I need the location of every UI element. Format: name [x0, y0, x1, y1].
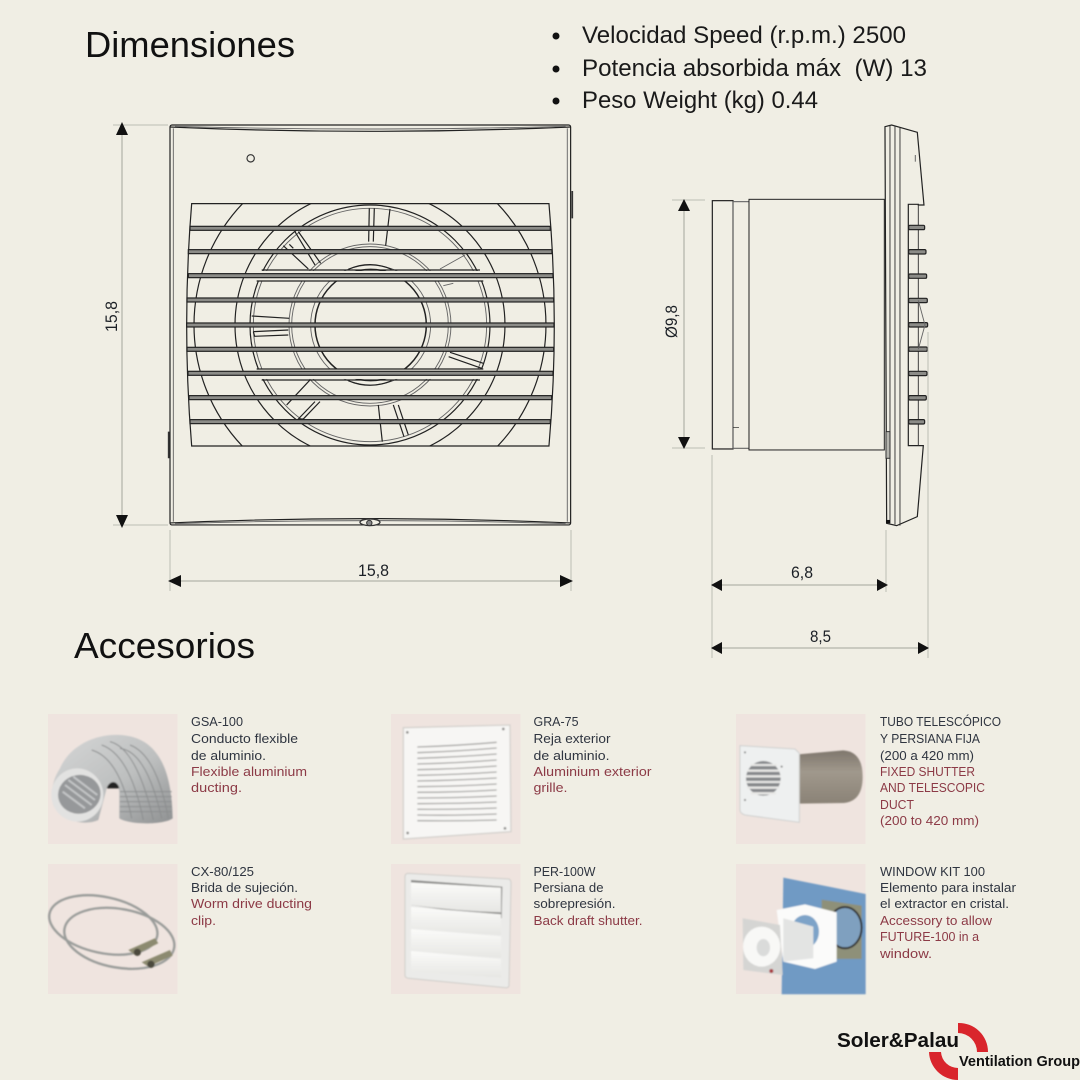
accessory: CX-80/125 — [44, 864, 312, 994]
image: back draft shutter — [405, 873, 511, 988]
text: GRA-75: GRA-75 — [534, 714, 578, 729]
accessory: window kit — [736, 864, 1017, 994]
text: CX-80/125: Brida de sujeción. — [191, 880, 298, 895]
text: window kit: WINDOW KIT 100 — [880, 864, 985, 879]
title: Dimensiones: Dimensiones — [85, 24, 295, 65]
text: CX-80/125: clip. — [191, 913, 216, 928]
text: window kit: Accessory to allow — [880, 913, 993, 928]
text: window kit — [879, 864, 1017, 961]
text: GSA-100: Conducto flexible — [191, 731, 298, 746]
text: GRA-75: grille. — [534, 780, 568, 795]
text: window kit: FUTURE-100 in a — [880, 929, 980, 944]
depth dimension label 68: 6,8 — [791, 563, 813, 582]
text: GSA-100: GSA-100 — [191, 714, 243, 729]
image: flexible duct — [47, 735, 173, 826]
text: GRA-75 — [534, 714, 652, 795]
diameter dimension label: Ø9,8 — [662, 305, 681, 338]
logo: Soler&Palau Ventilation Group — [837, 1023, 1080, 1080]
height dimension label: 15,8 — [102, 301, 121, 332]
specifications list — [552, 22, 927, 114]
text: GSA-100: ducting. — [191, 780, 242, 795]
text: telescopic tube: DUCT — [880, 797, 914, 812]
text: telescopic tube — [880, 714, 1001, 828]
accessory: PER-100W — [391, 864, 642, 994]
text: GSA-100: de aluminio. — [191, 748, 266, 763]
text: GSA-100 — [191, 714, 307, 795]
accessory: GRA-75 — [391, 714, 652, 844]
specifications list: Peso Weight (kg) 0.44 — [582, 87, 818, 114]
image: telescopic duct with shutter — [740, 746, 863, 822]
side view dimension lines — [662, 199, 929, 658]
text: telescopic tube: (200 a 420 mm) — [880, 748, 974, 763]
text: telescopic tube: (200 to 420 mm) — [880, 813, 979, 828]
text: window kit: window. — [879, 946, 932, 961]
image: exterior grille — [403, 725, 511, 839]
text: PER-100W: PER-100W — [534, 864, 596, 879]
specifications list: Velocidad Speed (r.p.m.) 2500 — [582, 22, 906, 49]
text: window kit: Elemento para instalar — [880, 880, 1017, 895]
text: telescopic tube: FIXED SHUTTER — [880, 764, 975, 779]
text: window kit: el extractor en cristal. — [880, 896, 1009, 911]
width dimension label: 15,8 — [358, 561, 389, 580]
specifications list: Potencia absorbida máx (W) 13 — [582, 55, 927, 82]
logo: Soler&Palau Ventilation Group: Ventilation Group — [959, 1054, 1080, 1070]
side view drawing of fan — [712, 125, 928, 526]
accessory: telescopic tube — [736, 714, 1001, 844]
logo red arcs — [929, 1023, 988, 1080]
title: Accesorios: Accesorios — [74, 625, 255, 666]
front view dimension lines — [102, 122, 573, 591]
text: GSA-100: Flexible aluminium — [191, 764, 307, 779]
text: PER-100W: sobrepresión. — [534, 896, 616, 911]
text: GRA-75: de aluminio. — [534, 748, 610, 763]
text: CX-80/125: CX-80/125 — [191, 864, 254, 879]
depth dimension label 85: 8,5 — [810, 627, 831, 646]
text: PER-100W — [534, 864, 642, 928]
text: telescopic tube: TUBO TELESCÓPICO — [880, 714, 1001, 729]
text: CX-80/125: Worm drive ducting — [191, 896, 312, 911]
text: GRA-75: Aluminium exterior — [534, 764, 652, 779]
front view drawing of fan — [169, 125, 572, 526]
text: PER-100W: Persiana de — [534, 880, 604, 895]
logo: Soler&Palau Ventilation Group: Soler&Palau — [837, 1029, 959, 1052]
text: CX-80/125 — [191, 864, 312, 928]
text: PER-100W: Back draft shutter. — [534, 913, 642, 928]
text: GRA-75: Reja exterior — [534, 731, 611, 746]
text: telescopic tube: AND TELESCOPIC — [880, 780, 985, 795]
image: ducting clips — [44, 886, 179, 977]
text: telescopic tube: Y PERSIANA FIJA — [880, 731, 980, 746]
image: window kit — [743, 878, 866, 994]
accessory: GSA-100 — [47, 714, 307, 844]
